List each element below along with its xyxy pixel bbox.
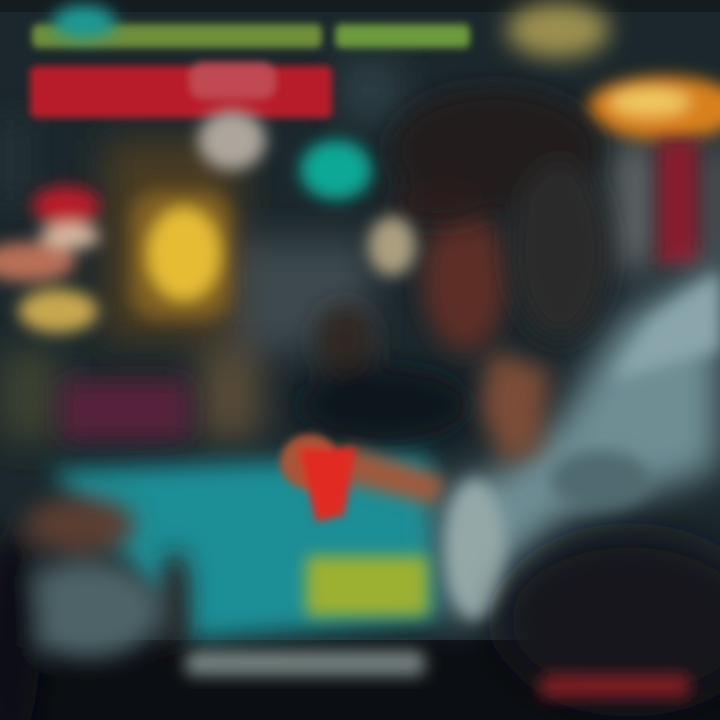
purple-red bench bbox=[60, 380, 190, 440]
red text blur, bottom right bbox=[540, 674, 690, 698]
top green banner bbox=[32, 24, 470, 48]
background wall tones bbox=[0, 60, 720, 440]
person shirt bbox=[440, 260, 720, 630]
arm reaching to cup bbox=[335, 445, 445, 505]
orange lamp bbox=[587, 76, 720, 140]
red column bbox=[658, 140, 698, 265]
person face bbox=[423, 208, 507, 352]
person hair bbox=[390, 88, 610, 340]
background dark figure bbox=[300, 305, 470, 443]
left hand with red and cream objects bbox=[0, 186, 100, 333]
person dark lower body bbox=[500, 535, 720, 705]
yellow-green card bbox=[306, 556, 428, 616]
white globe bbox=[198, 110, 266, 170]
red banner bbox=[30, 62, 332, 118]
white table edge bbox=[185, 650, 425, 676]
glowing white highlight near face bbox=[368, 216, 416, 276]
red cup bbox=[280, 434, 356, 522]
person neck bbox=[480, 350, 550, 465]
teal table bbox=[50, 455, 440, 640]
teal sign blob, top left bbox=[52, 5, 116, 39]
yellow lantern bbox=[130, 190, 232, 320]
person shirt highlights bbox=[445, 270, 720, 620]
foreground hand lower left bbox=[0, 497, 189, 720]
teal speech blob bbox=[300, 140, 372, 200]
yellow sign blob, top right bbox=[506, 2, 610, 58]
